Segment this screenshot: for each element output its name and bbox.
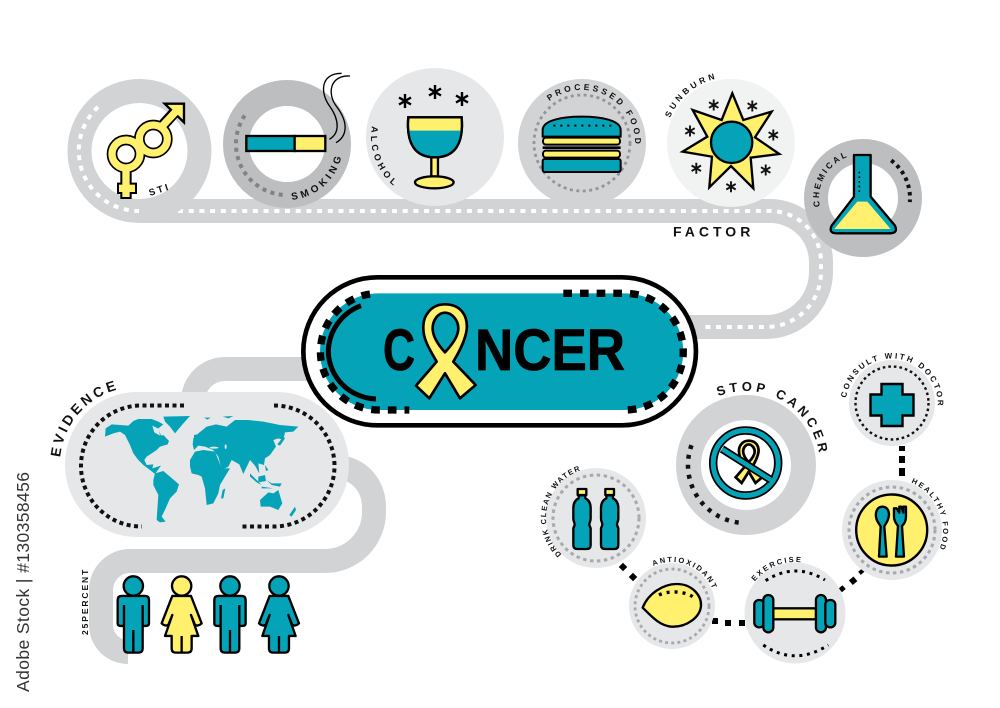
label: exercise: EXERCISE — [751, 556, 801, 582]
icon: burger — [543, 117, 621, 172]
heading: stop cancer: STOP CANCER — [716, 382, 828, 452]
chart: world map, Americas — [105, 416, 190, 522]
title: cancer, remaining letters: NCER — [475, 318, 625, 383]
icon: medical cross — [870, 384, 914, 426]
chart: world map, Old World — [190, 416, 298, 517]
panel: STI — [79, 91, 200, 211]
label: 25 percent: 25PERCENT — [80, 568, 90, 635]
icon: water bottles — [573, 489, 618, 549]
panel: smoking — [223, 72, 351, 208]
panel: cancer central badge — [303, 277, 696, 425]
icon: cigarette with smoke — [246, 73, 350, 151]
icon: flask — [831, 155, 896, 233]
panel: drink clean water — [540, 466, 646, 568]
panel: consult with doctor — [841, 352, 944, 446]
panel: exercise — [744, 556, 846, 664]
connectors between stop-cancer steps — [619, 446, 905, 626]
label: processed food: PROCESSED FOOD — [546, 84, 641, 144]
title: cancer, first letter: C — [383, 318, 415, 383]
icon: asterisks — [399, 85, 468, 108]
icon: woman 2 — [259, 576, 299, 653]
label: STI: STI — [148, 182, 172, 199]
road: factor path — [139, 211, 821, 327]
label: drink clean water: DRINK CLEAN WATER — [540, 466, 580, 558]
icon: woman 1 — [162, 576, 202, 653]
label: sunburn: SUNBURN — [665, 74, 714, 118]
icon: sun — [683, 93, 779, 188]
heading: factor: FACTOR — [673, 224, 754, 240]
stock credit: Adobe Stock | #130358456 — [13, 472, 33, 692]
panel: sunburn — [665, 74, 795, 207]
icon: man 2 — [214, 576, 246, 653]
icon: spoon and fork — [876, 507, 906, 557]
panel: stop cancer — [676, 382, 828, 535]
panel: healthy food — [842, 478, 948, 580]
icon: lemon — [643, 584, 701, 627]
icon: man 1 — [118, 576, 149, 653]
icon: dumbbell — [754, 571, 835, 656]
people icons — [118, 576, 299, 653]
panel: antioxidant — [629, 556, 717, 649]
panel: evidence world map — [50, 380, 349, 537]
icon: awareness ribbon — [416, 304, 476, 398]
panel: alcohol — [366, 68, 504, 206]
icon: crossed-out ribbon — [713, 430, 778, 496]
label: alcohol: ALCOHOL — [370, 126, 395, 186]
icon: wine glass — [408, 117, 462, 188]
panel: processed food — [518, 79, 646, 199]
label: smoking: SMOKING — [292, 156, 341, 200]
panel: chemical — [804, 139, 922, 257]
label: healthy food: HEALTHY FOOD — [912, 478, 948, 550]
label: antioxidant: ANTIOXIDANT — [653, 556, 717, 588]
label: consult with doctor: CONSULT WITH DOCTOR — [841, 352, 944, 406]
label: evidence: EVIDENCE — [50, 380, 116, 456]
road: evidence path — [101, 369, 374, 652]
icon: male and female symbols — [112, 104, 184, 199]
icon: sun asterisks — [685, 100, 778, 192]
label: chemical: CHEMICAL — [813, 153, 847, 207]
